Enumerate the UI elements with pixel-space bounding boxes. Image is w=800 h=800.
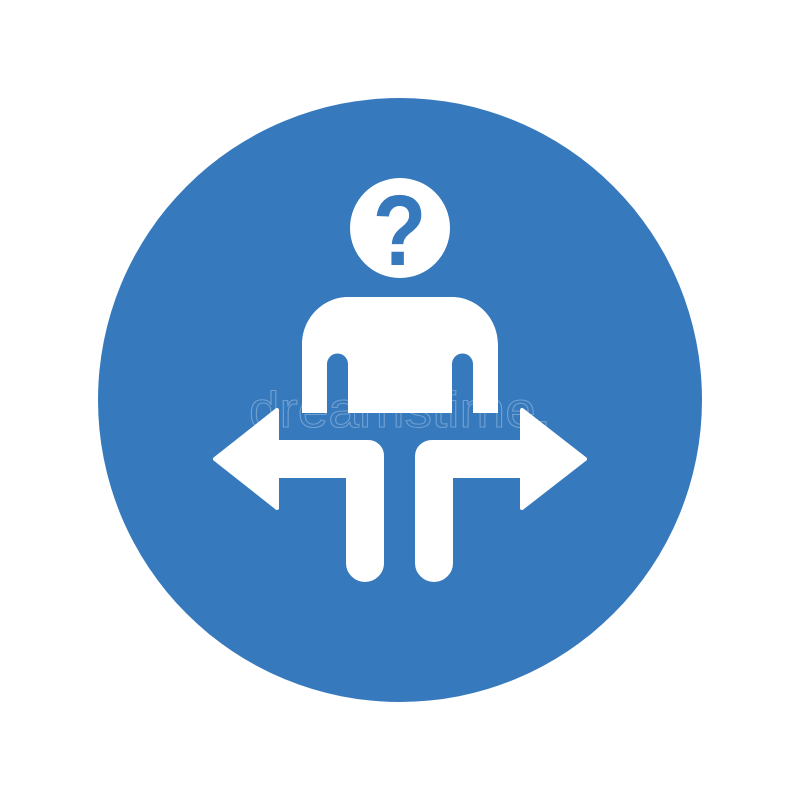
arrow: right [417,410,585,580]
blue circle background [98,98,702,702]
icon: head with question mark [350,175,450,286]
watermark: dreamstime. [249,382,551,438]
question mark: ? [373,175,426,286]
arrow: left [215,410,382,580]
icon: person body [302,297,498,413]
